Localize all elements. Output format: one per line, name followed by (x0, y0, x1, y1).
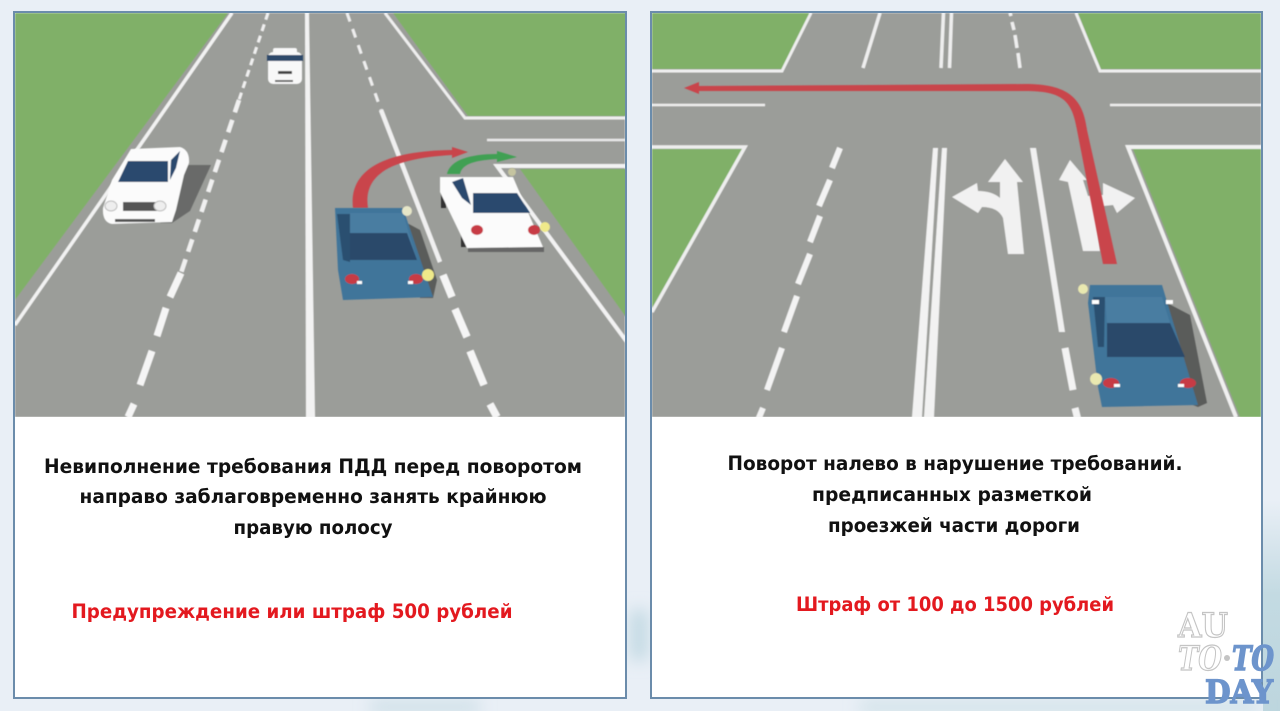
car: white in correct lane (440, 168, 550, 252)
car: far white oncoming (267, 48, 303, 84)
arrow: red left turn path (684, 82, 1117, 264)
text: left penalty: Предупреждение или штраф 500 рублей (72, 600, 512, 623)
car: blue in wrong lane (335, 206, 437, 300)
road marking: straight and left arrow (952, 159, 1024, 254)
text: right description: проезжей части дороги (828, 514, 1080, 537)
panel: right marking violation (651, 12, 1262, 698)
road illustration: right turn from wrong lane (15, 13, 627, 417)
watermark: AUTO TO DAY logo: DAY (1205, 673, 1274, 711)
car: blue turning left from right lane (1078, 284, 1207, 407)
arrow: red wrong path (353, 147, 468, 208)
watermark: AUTO TO DAY logo (1177, 606, 1274, 711)
text: right description (728, 452, 1182, 537)
text: right description: предписанных разметкой (812, 483, 1092, 506)
road illustration: left turn against markings (652, 13, 1261, 420)
arrow: green correct path (447, 151, 517, 174)
text: left description: Невиполнение требования ПДД перед поворотом (44, 455, 582, 478)
panel: left lane violation (14, 12, 627, 698)
watermark: AUTO TO DAY logo: AU (1177, 606, 1228, 646)
text: right description: Поворот налево в нарушение требований. (728, 452, 1182, 475)
text: left description (44, 455, 582, 539)
text: left description: правую полосу (234, 516, 393, 539)
road marking: straight and right arrow (1059, 160, 1135, 251)
watermark: AUTO TO DAY logo: TO (1178, 639, 1222, 679)
car: white oncoming left (103, 147, 211, 224)
text: right penalty: Штраф от 100 до 1500 рублей (796, 593, 1114, 616)
text: left description: направо заблаговременно занять крайнюю (80, 485, 547, 508)
